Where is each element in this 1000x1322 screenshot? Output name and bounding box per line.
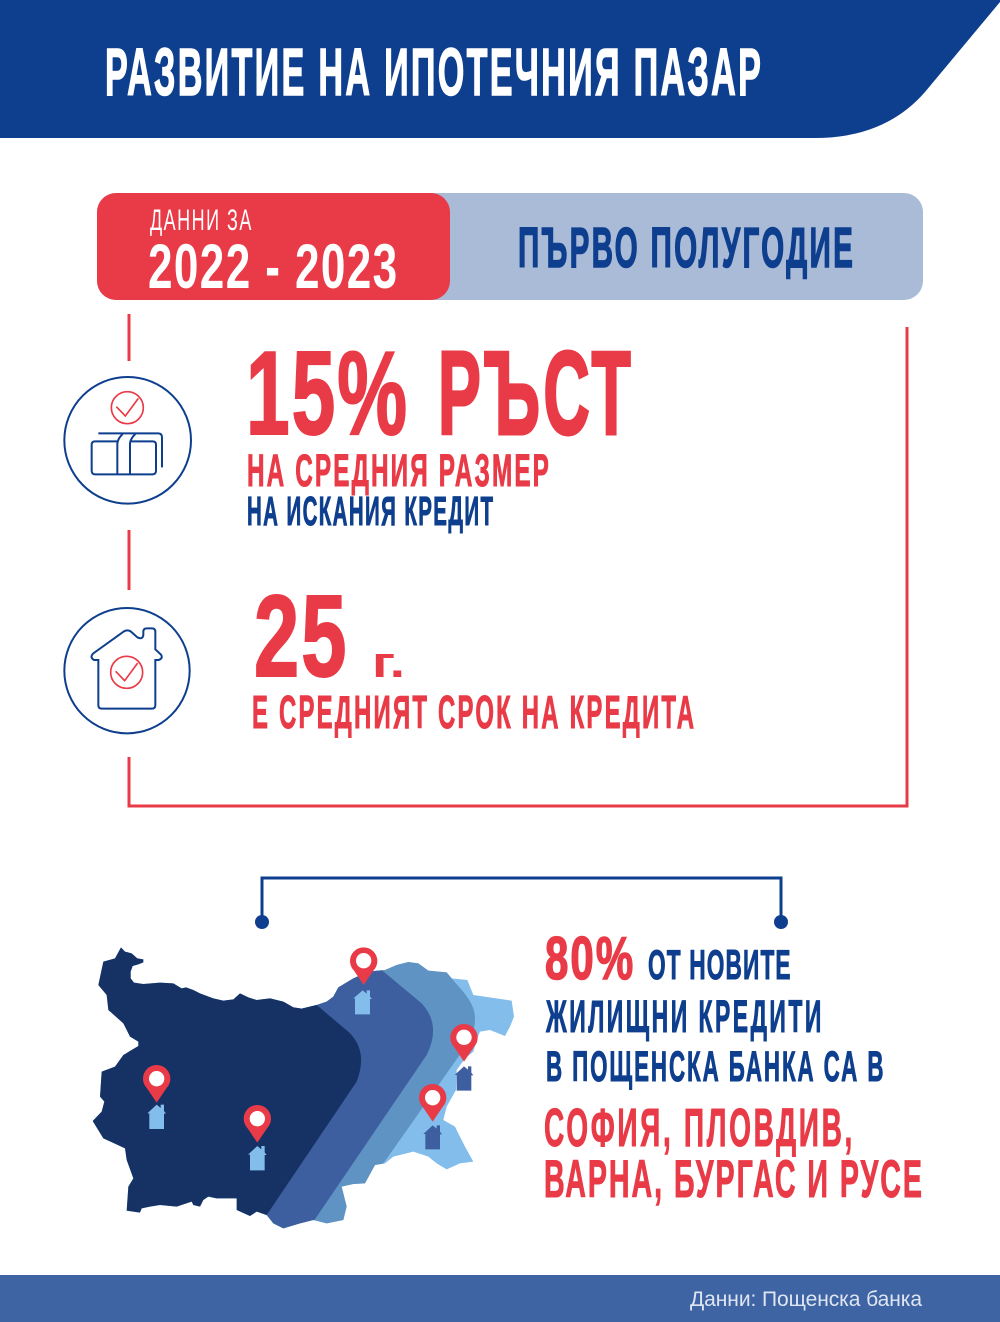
pin and house: Sofia [143, 1065, 170, 1129]
stat caption: average term: Е СРЕДНИЯТ СРОК НА КРЕДИТА [252, 687, 694, 738]
stat caption red: НА СРЕДНИЯ РАЗМЕР [247, 445, 549, 496]
period bar: light section [97, 193, 923, 300]
icon: house with check [64, 608, 190, 733]
stat: 15% growth: 15% [246, 328, 407, 460]
stat unit: г. [372, 638, 405, 687]
years: 2022 - 2023 [148, 231, 397, 302]
title: РАЗВИТИЕ НА ИПОТЕЧНИЯ ПАЗАР [105, 36, 761, 110]
cities line 2: ВАРНА, БУРГАС И РУСЕ [544, 1150, 922, 1209]
stat: 80%: 80% [545, 925, 633, 992]
label: data for: ДАННИ ЗА [150, 205, 252, 237]
pin and house: Plovdiv [244, 1105, 271, 1170]
stat: 25 years: 25 [254, 572, 346, 701]
pin and house: Burgas [419, 1084, 446, 1149]
text: in Postbank: В ПОЩЕНСКА БАНКА СА В [546, 1043, 883, 1091]
period bar: red section [97, 193, 450, 300]
red frame [129, 314, 907, 806]
bracket connector [255, 878, 788, 929]
period bar [97, 193, 923, 302]
pin and house: Varna [450, 1024, 478, 1091]
pin and house: Ruse [350, 947, 377, 1014]
stat: 15% growth: РЪСТ [438, 327, 631, 460]
stat: 15% growth [246, 327, 631, 460]
first half label: ПЪРВО ПОЛУГОДИЕ [518, 216, 853, 280]
source note: Данни: Пощенска банка [690, 1288, 922, 1311]
header banner [0, 0, 1000, 138]
text: housing loans: ЖИЛИЩНИ КРЕДИТИ [545, 992, 821, 1042]
icon: money with check [64, 377, 191, 504]
footer bar [0, 1275, 1000, 1322]
cities line 1: СОФИЯ, ПЛОВДИВ, [544, 1098, 852, 1159]
map of Bulgaria [92, 947, 514, 1228]
stat caption blue: НА ИСКАНИЯ КРЕДИТ [247, 488, 493, 534]
text: of the new: ОТ НОВИТЕ [648, 942, 791, 989]
